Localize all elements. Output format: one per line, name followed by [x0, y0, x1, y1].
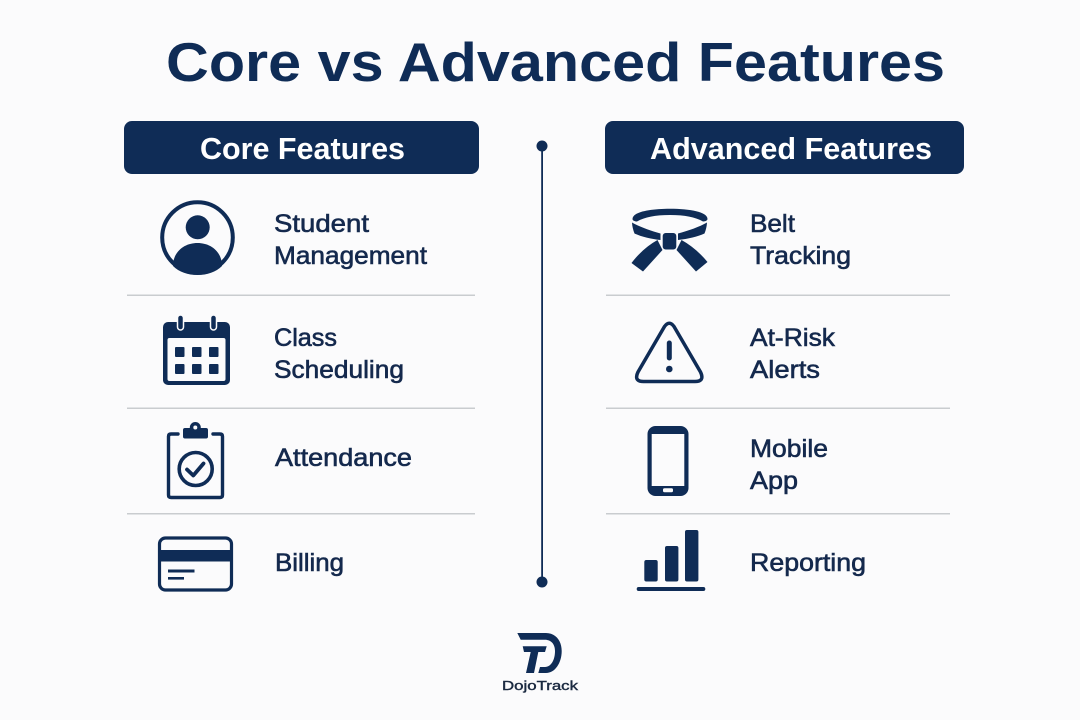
icon: billing card [160, 538, 232, 590]
label: student management: Student [274, 210, 369, 238]
label: billing: Billing [275, 549, 344, 577]
title: Core vs Advanced Features [166, 31, 945, 93]
label: belt tracking: Belt [750, 210, 795, 238]
logo wordmark: DojoTrack [502, 678, 579, 693]
icon: calendar [163, 315, 230, 385]
heading: advanced features: Advanced Features [650, 131, 932, 166]
heading: core features [124, 121, 479, 174]
icon: student [162, 202, 233, 275]
icon: attendance clipboard [168, 422, 222, 498]
logo mark [517, 633, 562, 673]
label: reporting: Reporting [750, 549, 866, 577]
label: at-risk alerts: Alerts [750, 356, 820, 384]
label: mobile app: App [750, 467, 798, 495]
heading: core features: Core Features [200, 131, 405, 166]
label: at-risk alerts: At-Risk [750, 324, 836, 352]
panel: advanced features [605, 121, 964, 591]
label: student management: Management [274, 242, 427, 270]
logo: DojoTrack [502, 633, 579, 693]
label: mobile app: Mobile [750, 435, 828, 463]
icon: mobile phone [648, 426, 688, 496]
icon: warning triangle [637, 323, 702, 382]
label: attendance: Attendance [275, 444, 412, 472]
center divider [536, 140, 548, 588]
icon: reporting bar chart [637, 530, 705, 591]
label: class scheduling: Scheduling [274, 356, 404, 384]
panel: core features [124, 121, 479, 590]
icon: belt [632, 209, 708, 272]
heading: advanced features [605, 121, 964, 174]
label: class scheduling: Class [274, 324, 337, 352]
label: belt tracking: Tracking [750, 242, 851, 270]
